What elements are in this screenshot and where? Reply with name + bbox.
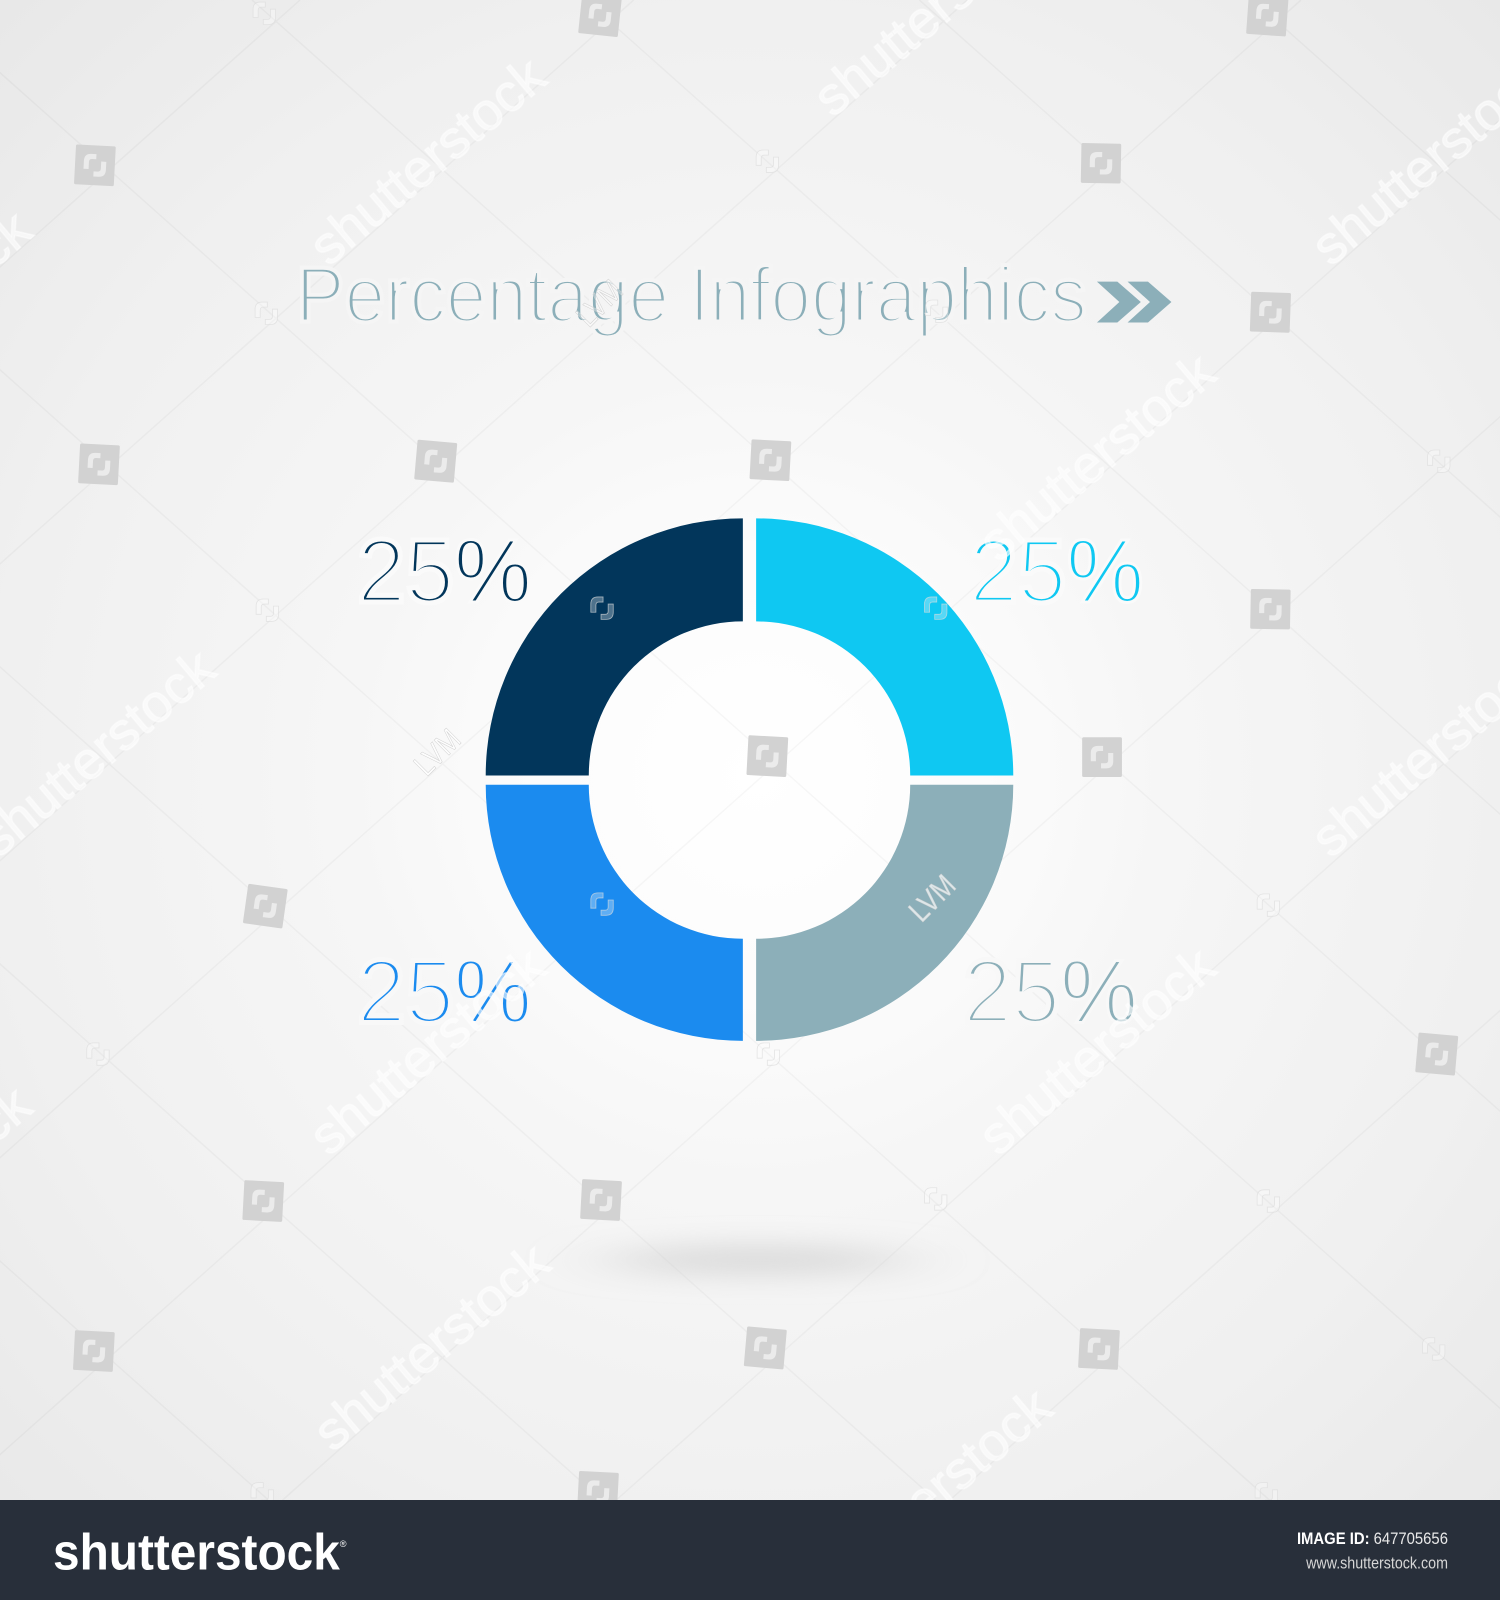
- watermark: LVM marks: LVM: [902, 868, 962, 928]
- segment: cyan 25%: [756, 518, 1013, 776]
- watermark wordmarks: shutterstock: [302, 1232, 561, 1462]
- watermark: LVM marks: LVM: [570, 273, 630, 334]
- label: 25% dark navy: 25%: [357, 522, 532, 622]
- footer bar: [0, 1500, 1500, 1600]
- title: Percentage Infographics: [296, 252, 1087, 338]
- segment: bright blue 25%: [486, 785, 743, 1041]
- watermark wordmarks: shutterstock: [298, 936, 557, 1166]
- watermark wordmarks: shutterstock: [968, 342, 1226, 572]
- floor shadow: [604, 1246, 910, 1274]
- watermark wordmarks: shutterstock: [298, 46, 557, 277]
- footer logo: shutterstock: [53, 1523, 340, 1580]
- segment: dark navy 25%: [486, 518, 743, 776]
- footer image id: IMAGE ID: 647705656: [1297, 1530, 1448, 1548]
- label: 25% grey blue: 25%: [963, 942, 1138, 1042]
- watermark: LVM marks: LVM: [407, 722, 468, 783]
- watermark: LVM marks: [407, 273, 962, 928]
- segment: grey blue 25%: [756, 785, 1013, 1041]
- watermark wordmarks: shutterstock: [968, 936, 1226, 1166]
- footer site address: www.shutterstock.com: [1305, 1554, 1448, 1572]
- label: 25% bright blue: 25%: [357, 942, 532, 1042]
- icon: double chevron arrow: [1097, 282, 1171, 322]
- donut chart: [486, 518, 1013, 1041]
- footer registered mark: ®: [340, 1539, 347, 1549]
- label: 25% cyan: 25%: [969, 522, 1144, 622]
